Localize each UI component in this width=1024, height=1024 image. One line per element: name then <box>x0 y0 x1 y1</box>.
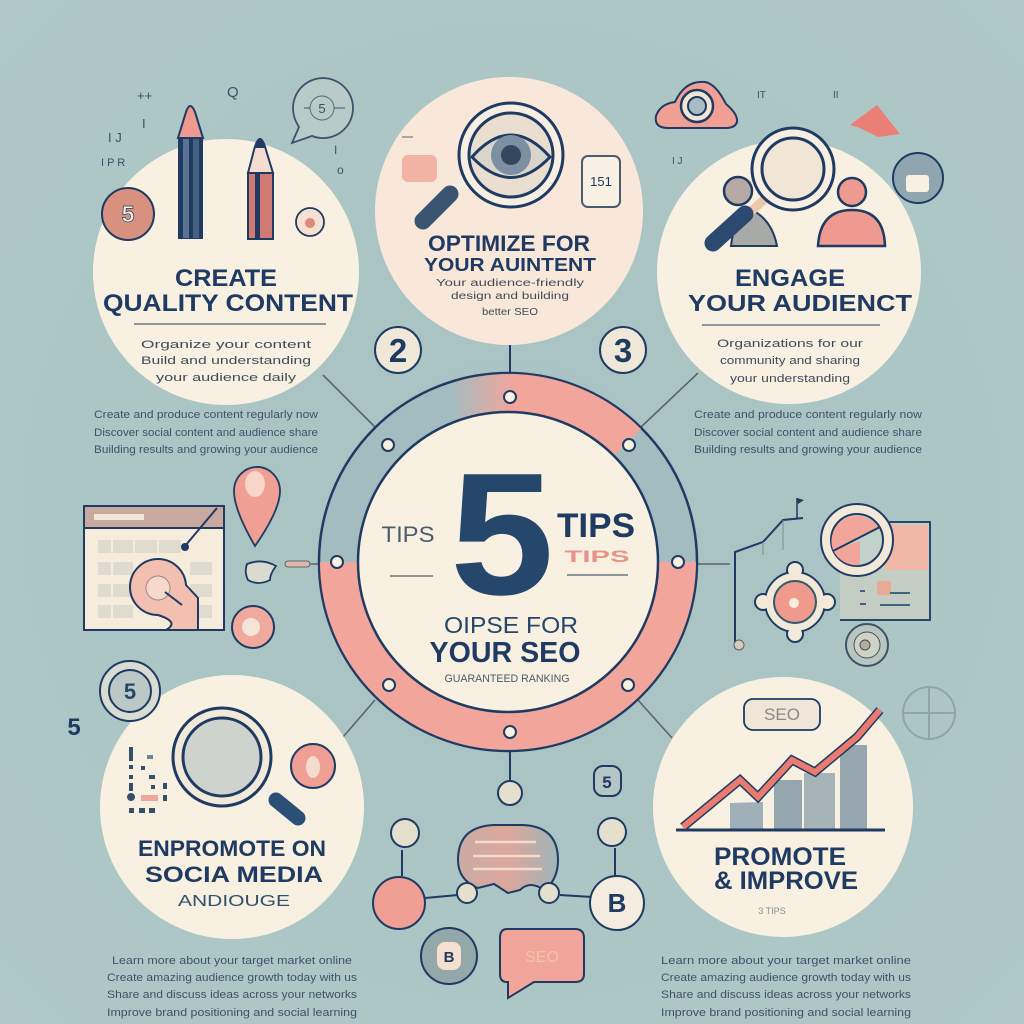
icon: dot matrix <box>127 747 167 813</box>
number two <box>375 327 421 373</box>
tagline: GUARANTEED RANKING <box>444 673 570 685</box>
body text: Organizations for our <box>717 338 863 350</box>
decorative top-right glyphs: II <box>833 90 839 101</box>
text block: bottom left: Improve brand positioning and social learning <box>107 1007 357 1019</box>
badge letters <box>444 773 626 966</box>
decorative top-left glyphs: I P R <box>101 157 125 169</box>
text block: bottom right: Create amazing audience growth today with us <box>661 972 912 984</box>
body text: community and sharing <box>720 355 860 367</box>
tips rules <box>390 575 628 576</box>
icon: speech badge top <box>292 78 353 143</box>
tips faint right: TIPS <box>564 547 630 566</box>
icon: chat bubble pink <box>500 929 584 998</box>
icon: magnifier with eye <box>423 103 563 221</box>
icon: magnifier <box>173 708 298 818</box>
connectors <box>286 336 730 781</box>
icon: gear <box>755 562 835 642</box>
big five: 5 <box>450 436 554 631</box>
icon: paper plane <box>850 105 900 137</box>
text block: bottom right: Improve brand positioning and social learning <box>661 1007 911 1019</box>
number three: 3 <box>614 332 632 369</box>
text block: left middle: Discover social content and audience share <box>94 427 318 439</box>
heading: OPTIMIZE FOR <box>428 231 590 256</box>
decorative top-right glyphs <box>672 90 839 167</box>
decorative top-left glyphs: ++ <box>137 88 152 103</box>
decorative top-left glyphs: Q <box>227 84 239 101</box>
heading line two: YOUR AUDIENCT <box>688 290 912 316</box>
tips faint left: TIPS <box>382 522 434 547</box>
subtitle: OIPSE FOR <box>444 612 578 638</box>
number three <box>600 327 646 373</box>
icon: small s badge <box>291 744 335 788</box>
icon: small blob <box>246 561 276 583</box>
body text: design and building <box>451 291 569 302</box>
heading line two: SOCIA MEDIA <box>145 862 323 887</box>
network icons <box>373 766 644 984</box>
body text: your audience daily <box>156 372 297 384</box>
icon: small card <box>402 137 437 182</box>
icon: cloud eye <box>656 82 737 128</box>
body text <box>436 278 584 318</box>
small label: 3 TIPS <box>758 906 786 916</box>
text block: bottom right: Share and discuss ideas across your networks <box>661 989 912 1001</box>
text block: bottom right: Learn more about your target market online <box>661 955 911 967</box>
text block: bottom left: Learn more about your target market online <box>112 955 352 967</box>
heading line two: & IMPROVE <box>714 867 858 895</box>
decorative top-left glyphs: I J <box>108 130 122 145</box>
decorative top-right glyphs: I J <box>672 156 683 167</box>
icon: pencil two <box>248 138 273 239</box>
icon: pencil one <box>178 106 203 239</box>
heading line two: YOUR AUINTENT <box>424 255 596 275</box>
icon: round badge <box>232 606 274 648</box>
seo tag: SEO <box>764 705 800 724</box>
divider <box>134 323 326 325</box>
icon: speech badge top: 5 <box>318 101 326 116</box>
text block: left middle: Building results and growing your audience <box>94 444 318 456</box>
text block: right middle: Create and produce content regularly now <box>694 409 922 421</box>
body text: better SEO <box>482 307 538 318</box>
seo tag <box>744 699 820 730</box>
decorative top-left glyphs: o <box>337 163 344 177</box>
heading: PROMOTE <box>714 843 846 871</box>
icon: note card: 151 <box>590 174 612 189</box>
heading: ENPROMOTE ON <box>138 836 326 861</box>
icon: small badge <box>296 208 324 236</box>
icon: line chart right <box>734 498 804 650</box>
text block: right middle: Discover social content and audience share <box>694 427 922 439</box>
chart: growth bars <box>676 710 885 830</box>
icon: number badge <box>102 188 154 240</box>
subtitle line two: YOUR SEO <box>430 637 580 669</box>
central hub ring <box>319 373 697 751</box>
panel: optimize for your audience <box>375 77 643 345</box>
icon: magnifier with people <box>713 128 885 246</box>
text block: bottom left <box>107 955 358 1019</box>
text block: bottom right <box>661 955 912 1019</box>
icon: pie gauge <box>821 504 893 576</box>
panel: engage your audience <box>657 128 921 404</box>
text block: right middle: Building results and growing your audience <box>694 444 922 456</box>
divider <box>702 324 880 326</box>
panel: promote on social media <box>100 675 364 939</box>
body text <box>717 338 863 385</box>
heading: ENGAGE <box>735 265 845 292</box>
icon: badge five top left: 5 <box>124 679 136 704</box>
sub heading: ANDIOUGE <box>178 893 290 910</box>
body text: Build and understanding <box>141 355 311 367</box>
text block: bottom left: Share and discuss ideas across your networks <box>107 989 358 1001</box>
icon: small gear <box>846 624 888 666</box>
text block: left middle <box>94 409 318 456</box>
icon: report panel <box>840 522 930 620</box>
decorative top-left glyphs: I <box>334 143 337 157</box>
decorative top-left glyphs <box>101 84 344 177</box>
icon: badge five top left <box>100 661 160 721</box>
heading line two: QUALITY CONTENT <box>103 290 353 317</box>
panel: promote and improve <box>653 677 913 937</box>
icon: note card <box>582 156 620 207</box>
panel: create quality content <box>93 106 359 405</box>
body text <box>141 339 311 384</box>
number five: 5 <box>67 714 81 741</box>
icon: target right <box>903 687 955 739</box>
icon: calendar <box>84 506 224 630</box>
heading: CREATE <box>175 265 277 292</box>
number two: 2 <box>389 332 407 369</box>
body text: Organize your content <box>141 339 311 351</box>
tips: TIPS <box>557 507 635 545</box>
body text: Your audience-friendly <box>436 278 584 289</box>
text block: left middle: Create and produce content regularly now <box>94 409 318 421</box>
body text: your understanding <box>730 373 850 385</box>
badge letters: 5 <box>602 773 612 792</box>
badge letters: B <box>444 949 455 966</box>
badge letters: B <box>608 888 626 918</box>
icon: chat bubble pink: SEO <box>525 949 559 966</box>
decorative top-right glyphs: IT <box>757 90 766 101</box>
icon: camera badge <box>893 153 943 203</box>
text block: bottom left: Create amazing audience growth today with us <box>107 972 358 984</box>
icon: map pin <box>234 467 280 546</box>
icon: number badge: 5 <box>122 201 135 227</box>
icon: small pill <box>285 561 310 567</box>
icon: speech bubble center bottom <box>458 825 558 893</box>
text block: right middle <box>694 409 922 456</box>
decorative top-left glyphs: I <box>142 116 146 131</box>
